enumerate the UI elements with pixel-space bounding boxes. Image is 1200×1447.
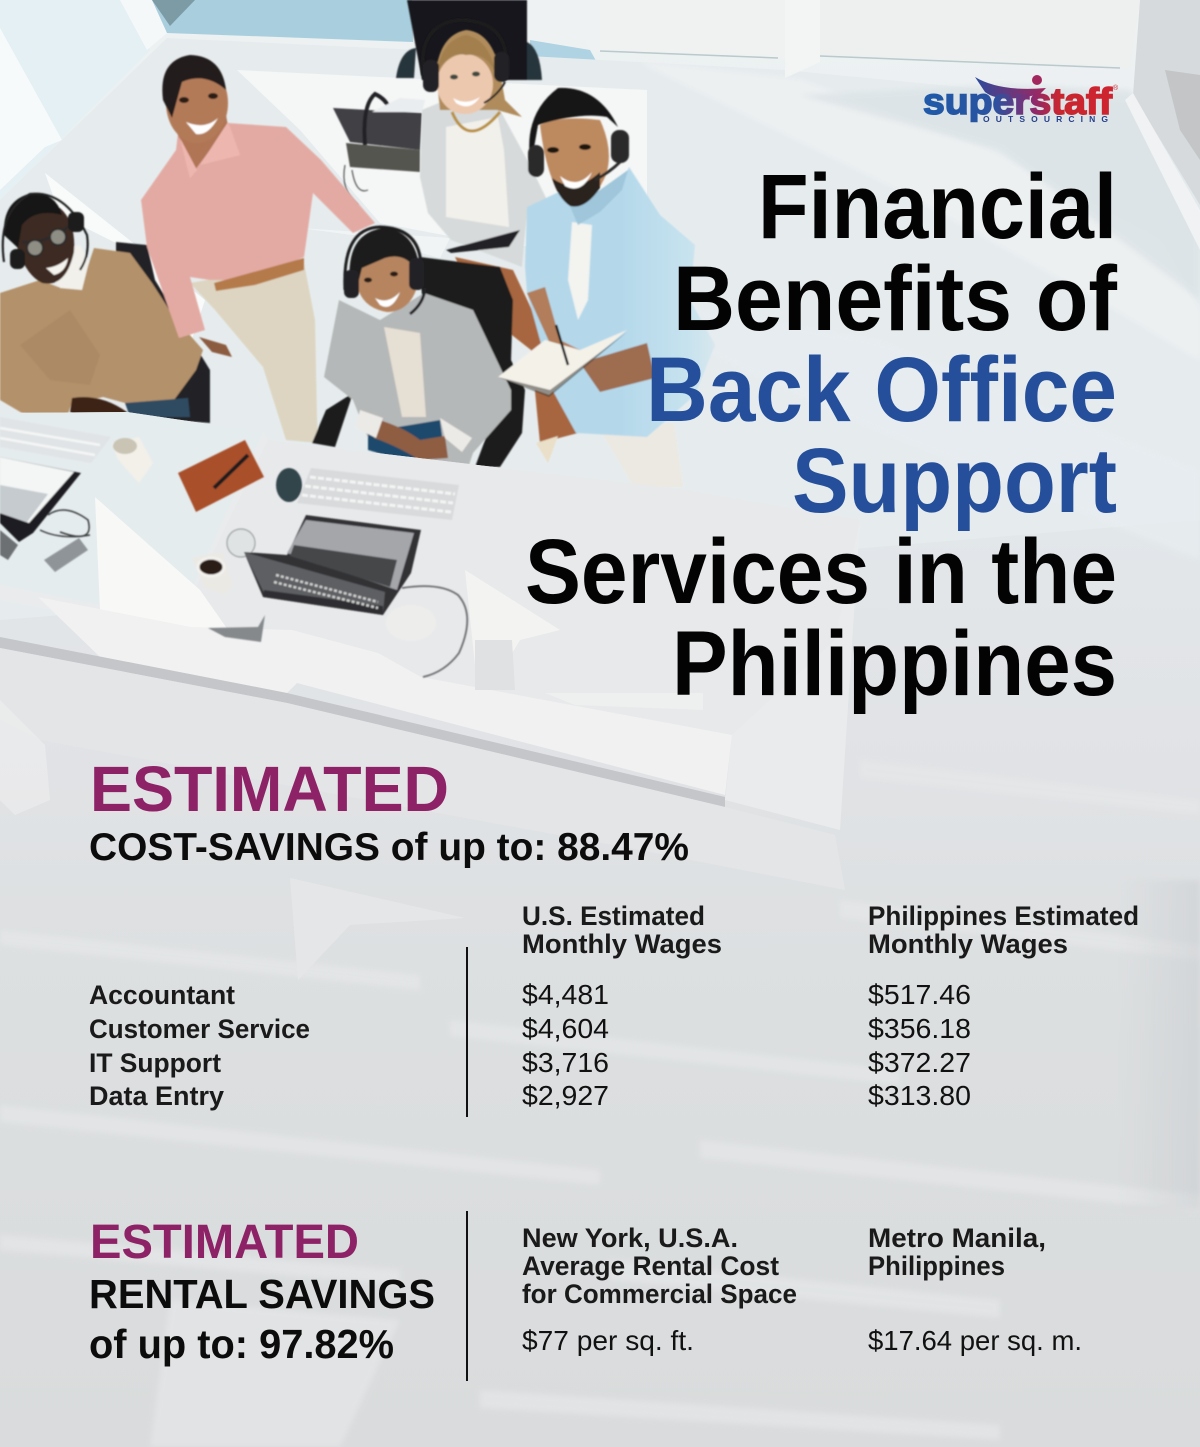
New York column: [522, 1223, 797, 1356]
role labels: Accountant: [89, 980, 235, 1010]
mouse: [276, 468, 302, 502]
column headers: Monthly Wages: [868, 929, 1068, 959]
logo: OUTSOURCING: [983, 114, 1108, 124]
title: Support: [792, 430, 1117, 532]
cable: [402, 586, 467, 677]
keyboard centre: [297, 468, 459, 520]
floor: [0, 38, 1200, 620]
title: [525, 156, 1117, 715]
Philippines wages: $313.80: [868, 1080, 971, 1111]
person: standing man in blue shirt: [498, 88, 715, 487]
heading: rental savings: of up to: 97.82%: [89, 1321, 394, 1367]
U.S. wages: $2,927: [522, 1080, 609, 1111]
role labels: IT Support: [89, 1048, 221, 1078]
Philippines wages: [868, 979, 971, 1111]
column headers: Philippines Estimated: [868, 901, 1139, 931]
heading: cost savings: COST-SAVINGS of up to: 88.47%: [89, 826, 689, 869]
keyboard left: [0, 417, 111, 463]
sunlit patches: [45, 173, 205, 345]
person: left man with headset: [0, 193, 210, 428]
left laptop: [0, 457, 90, 572]
column headers: Monthly Wages: [522, 929, 722, 959]
photo: front desks: [0, 412, 860, 980]
outlet: [386, 605, 436, 641]
Metro Manila column: Philippines: [868, 1251, 1005, 1281]
New York column: $77 per sq. ft.: [522, 1325, 694, 1356]
New York column: for Commercial Space: [522, 1279, 797, 1309]
coffee cup: [192, 552, 233, 594]
back chair: [396, 0, 542, 80]
title: Back Office: [646, 339, 1117, 441]
title: Philippines: [672, 613, 1117, 715]
lamp base: [208, 615, 265, 642]
divider: [466, 947, 468, 1117]
Metro Manila column: $17.64 per sq. m.: [868, 1325, 1082, 1356]
heading: cost savings: [89, 753, 689, 869]
glass: [227, 529, 255, 557]
U.S. wages: $4,481: [522, 979, 609, 1010]
logo: superstaff: [923, 81, 1113, 122]
wage table: [89, 901, 1139, 1117]
Philippines wages: $372.27: [868, 1047, 971, 1078]
rental table: [466, 1211, 1082, 1381]
divider: [466, 1211, 468, 1381]
centre laptop: [244, 515, 421, 615]
heading: rental savings: RENTAL SAVINGS: [89, 1271, 435, 1317]
column headers: [522, 901, 1139, 959]
photo: people: [0, 20, 715, 487]
logo: ®: [1113, 84, 1119, 92]
role labels: Data Entry: [89, 1081, 224, 1111]
role labels: [89, 980, 310, 1111]
U.S. wages: $4,604: [522, 1013, 609, 1044]
U.S. wages: $3,716: [522, 1047, 609, 1078]
New York column: Average Rental Cost: [522, 1251, 779, 1281]
title: Financial: [758, 156, 1117, 258]
New York column: New York, U.S.A.: [522, 1223, 738, 1253]
person: standing woman in pink: [141, 55, 375, 443]
Metro Manila column: Metro Manila,: [868, 1223, 1046, 1253]
heading: rental savings: [89, 1216, 435, 1367]
left wall: [0, 0, 150, 200]
title: Services in the: [525, 521, 1117, 623]
column headers: U.S. Estimated: [522, 901, 705, 931]
mug left: [112, 437, 153, 483]
Philippines wages: $517.46: [868, 979, 971, 1010]
window: [152, 0, 413, 42]
right edge shading: [1120, 880, 1200, 1210]
role labels: Customer Service: [89, 1014, 310, 1044]
title: Benefits of: [673, 248, 1117, 350]
window frame upper right: [785, 0, 820, 78]
person: standing blonde woman with tablet: [420, 20, 578, 463]
notebook orange: [178, 440, 264, 512]
heading: rental savings: ESTIMATED: [90, 1216, 359, 1269]
floor planks: [0, 760, 1200, 1447]
Philippines wages: $356.18: [868, 1013, 971, 1044]
U.S. wages: [522, 979, 609, 1111]
Metro Manila column: [868, 1223, 1082, 1356]
back laptop: [333, 94, 425, 205]
heading: cost savings: ESTIMATED: [90, 753, 449, 825]
photo: back chair and laptop: [333, 0, 542, 205]
person: seated woman in grey blazer: [312, 227, 525, 467]
photo: desk objects: [0, 417, 467, 677]
